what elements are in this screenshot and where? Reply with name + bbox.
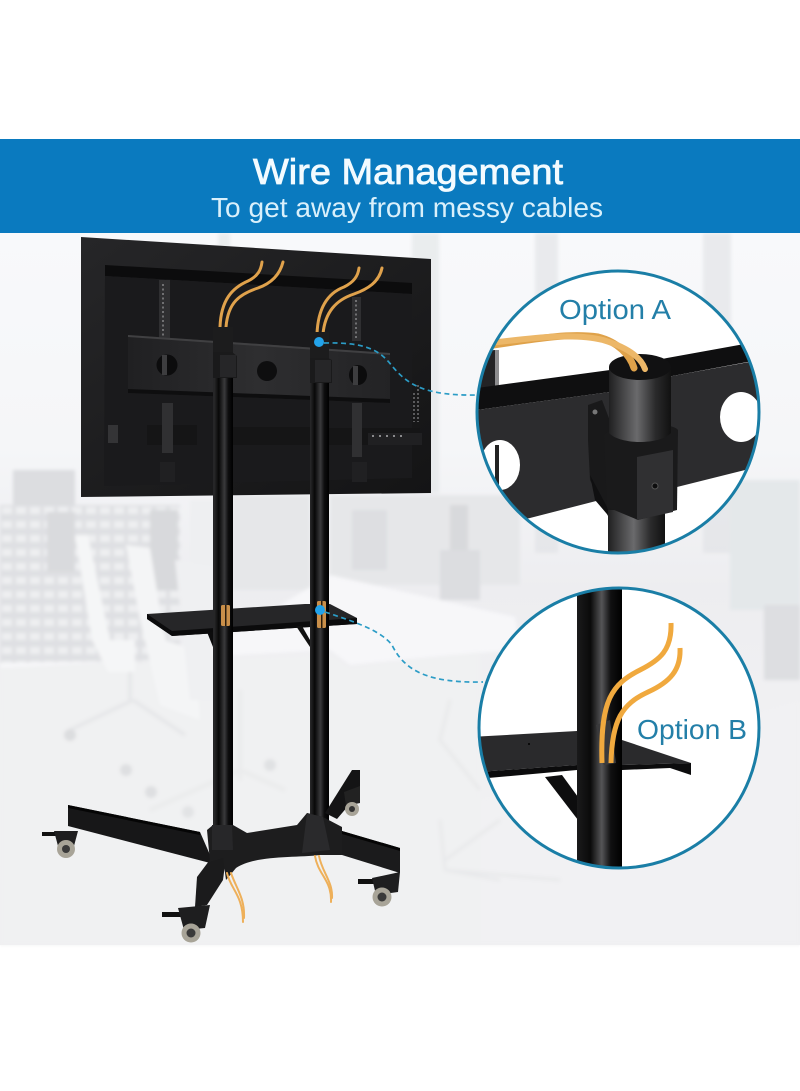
callout dot B xyxy=(315,605,325,615)
callout dot A xyxy=(314,337,324,347)
title: Wire Management xyxy=(253,151,563,192)
wires B xyxy=(602,623,680,763)
mount plate xyxy=(128,335,390,403)
floor and table top xyxy=(0,575,520,668)
chairs xyxy=(75,535,135,672)
TV back panel xyxy=(81,237,431,497)
left pole xyxy=(213,327,237,827)
front left caster xyxy=(162,905,210,942)
top tube xyxy=(609,367,671,442)
shelf xyxy=(147,604,357,647)
clamp xyxy=(614,426,678,520)
circle outline A xyxy=(477,271,759,553)
callout line A xyxy=(324,343,478,395)
orange wire clips on poles xyxy=(221,601,326,628)
front right arm xyxy=(342,831,400,873)
front left arm xyxy=(195,857,226,907)
label: option B: Option B xyxy=(637,714,747,745)
bracket ear xyxy=(588,400,614,516)
left arm xyxy=(68,805,214,864)
circle outline B xyxy=(479,588,759,868)
header banner xyxy=(0,139,800,233)
rear right arm xyxy=(325,770,360,819)
callout line B xyxy=(325,612,483,682)
lower pole xyxy=(608,510,665,552)
TV wires xyxy=(220,262,382,334)
central beam xyxy=(207,813,342,880)
right pole xyxy=(310,332,332,827)
background: blurred office photo xyxy=(0,233,800,945)
panel: option A detail xyxy=(470,271,765,560)
label: option A: Option A xyxy=(559,294,671,325)
rear left caster xyxy=(42,831,78,858)
front right caster xyxy=(358,872,400,906)
panel: option B detail xyxy=(470,585,759,875)
wires A xyxy=(480,336,645,369)
rear right caster xyxy=(344,786,360,816)
base frame with casters xyxy=(42,770,400,942)
subtitle: To get away from messy cables xyxy=(211,192,603,223)
wires below base xyxy=(227,856,332,922)
